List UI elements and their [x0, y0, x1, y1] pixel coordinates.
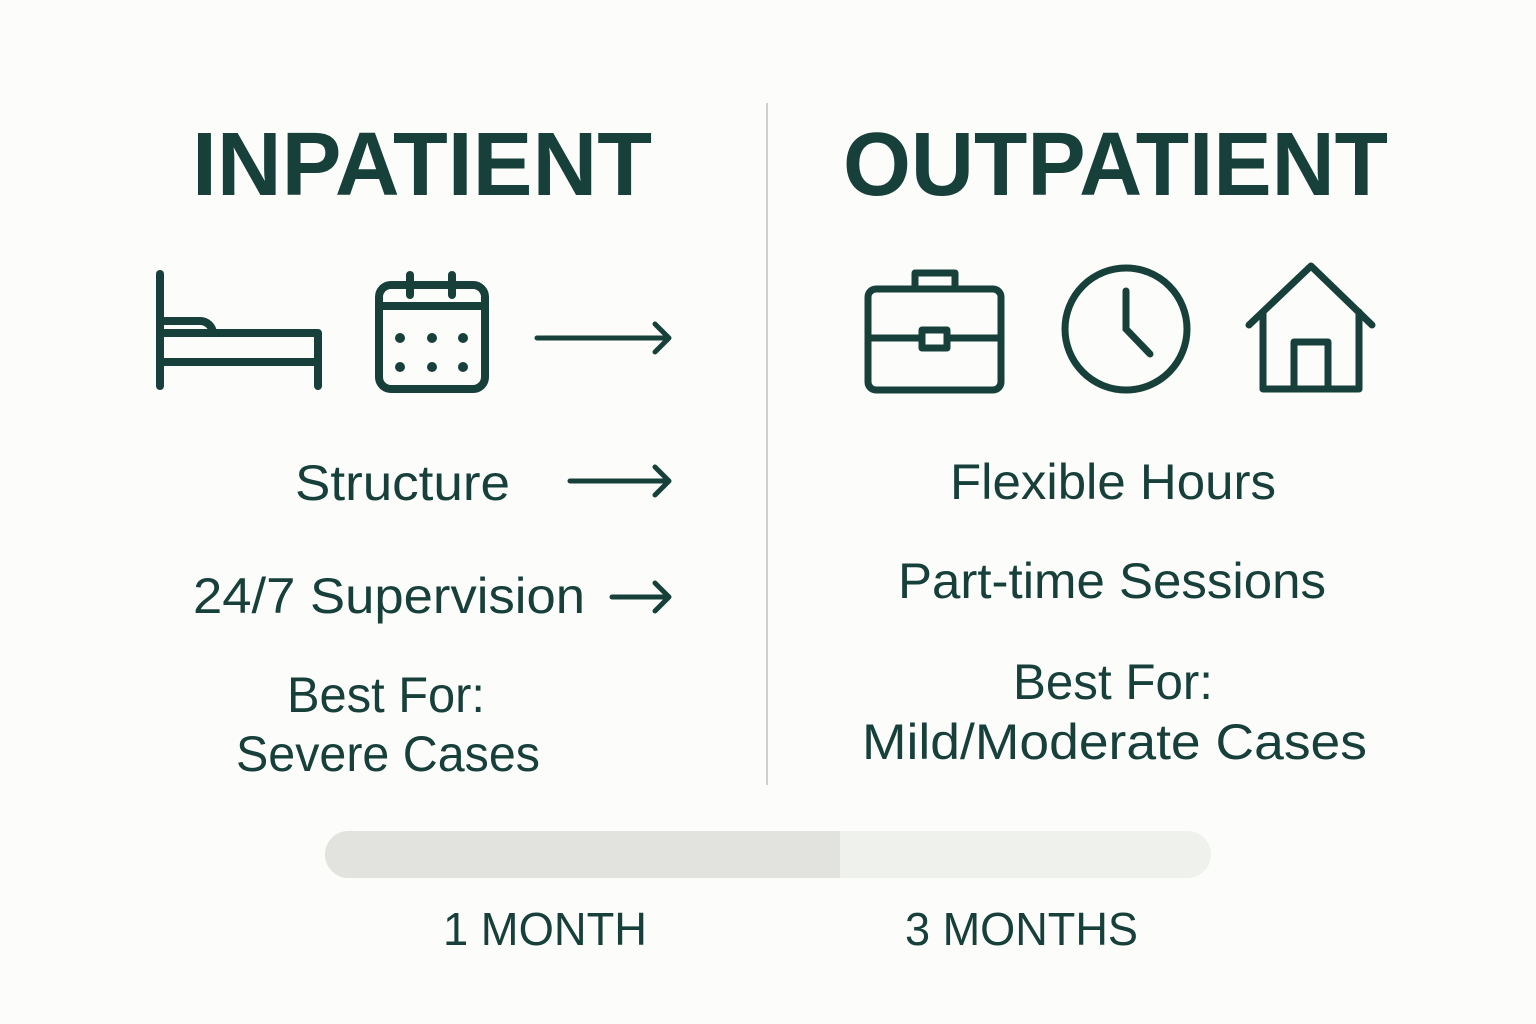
- text: best for severe: Best For:: [287, 667, 485, 723]
- icon: bed: [160, 274, 318, 386]
- text: structure: Structure: [295, 455, 510, 511]
- text: best for severe: [236, 667, 540, 782]
- icon: calendar: [379, 275, 485, 389]
- text: best for severe: Severe Cases: [236, 726, 540, 782]
- arrow: structure: [570, 467, 669, 495]
- text: flexible hours: Flexible Hours: [950, 454, 1276, 510]
- label: 3 months: 3 MONTHS: [905, 903, 1138, 955]
- arrow: icons: [537, 324, 669, 352]
- icon: briefcase: [868, 273, 1001, 390]
- icon: clock: [1065, 268, 1187, 390]
- duration bar: [325, 831, 1211, 878]
- text: best for mild: [862, 654, 1367, 770]
- icon: house: [1249, 266, 1372, 389]
- text: best for mild: Mild/Moderate Cases: [862, 714, 1367, 770]
- arrow: supervision: [612, 583, 669, 611]
- text: supervision: 24/7 Supervision: [193, 568, 585, 624]
- text: best for mild: Best For:: [1013, 654, 1213, 710]
- title: outpatient: OUTPATIENT: [843, 115, 1388, 215]
- label: 1 month: 1 MONTH: [443, 903, 647, 955]
- text: part-time sessions: Part-time Sessions: [898, 553, 1326, 609]
- title: inpatient: INPATIENT: [192, 115, 652, 215]
